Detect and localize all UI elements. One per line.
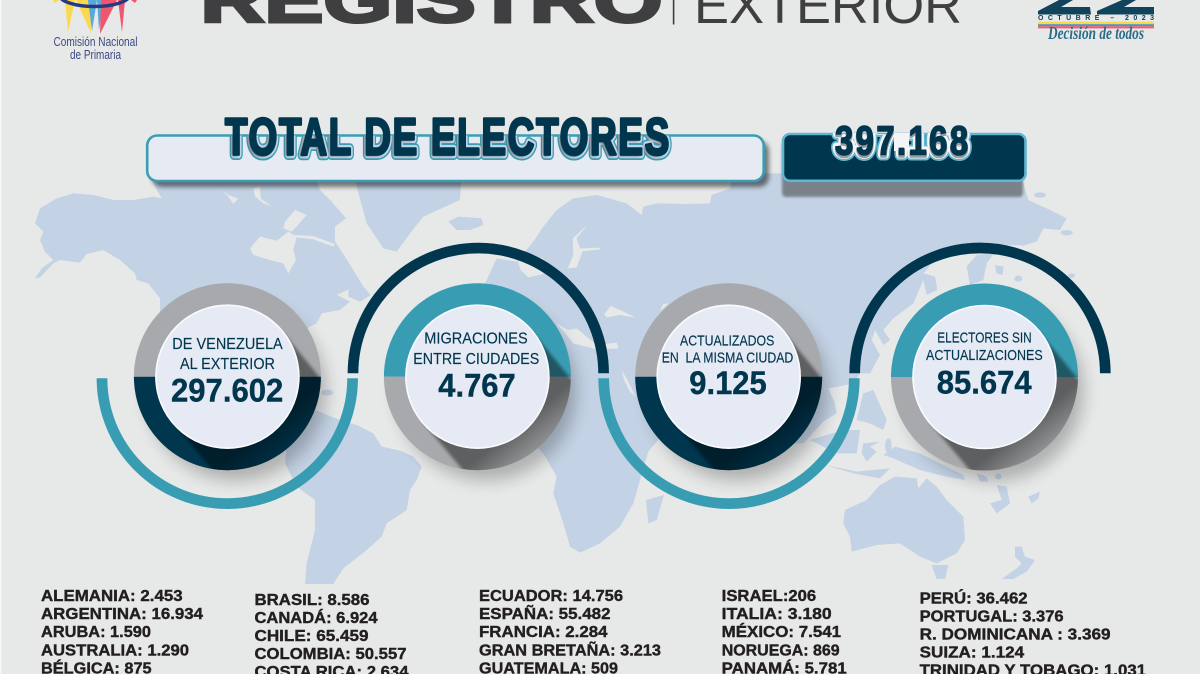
map: iceland: [448, 217, 483, 230]
title outline: [230, 136, 672, 160]
label line 2: ACTUALIZACIONES: [926, 348, 1043, 364]
number outline: [831, 133, 972, 161]
label: ELECTORES SIN: [937, 330, 1032, 346]
country list column 5: PORTUGAL: 3.376: [920, 608, 1064, 626]
ring and shadow: [635, 283, 836, 488]
title text: TOTAL DE ELECTORES: [225, 108, 671, 166]
label line 2: ENTRE CIUDADES: [413, 351, 539, 368]
map: australia: [843, 477, 965, 563]
country list column 2: BRASIL: 8.586: [254, 592, 370, 609]
country list column 1: ARUBA: 1.590: [41, 624, 151, 641]
header: registro exterior: [200, 0, 962, 36]
panel: electores sin actualizaciones: [891, 284, 1092, 489]
country list column 4: ITALIA: 3.180: [722, 606, 832, 623]
label: MIGRACIONES: [424, 330, 528, 347]
number outline: 397.168: [835, 118, 970, 164]
arc: navy over circle 4: [855, 248, 1105, 373]
panel: total de electores: [147, 108, 769, 187]
title box shadow: [152, 141, 769, 187]
value: 85.674: [937, 364, 1032, 400]
title box: [147, 136, 764, 181]
ring and shadow: [134, 283, 334, 488]
logo: 22 octubre 2023: [1038, 0, 1154, 43]
number box: [783, 134, 1026, 181]
country list column 1: ARGENTINA: 16.934: [41, 606, 203, 623]
number text: 397.168: [835, 118, 970, 164]
label: ACTUALIZADOS: [680, 334, 775, 350]
label line 2: AL EXTERIOR: [180, 356, 275, 373]
label: DE VENEZUELA: [172, 336, 283, 353]
country list column 5: PERÚ: 36.462: [920, 588, 1028, 608]
map: greenland: [357, 173, 462, 252]
country list column 2: COLOMBIA: 50.557: [254, 646, 407, 663]
country list column 2: CANADÁ: 6.924: [254, 608, 378, 627]
panel: total number: [782, 118, 1026, 197]
country list column 3: FRANCIA: 2.284: [479, 624, 608, 641]
arc: teal under circle 1: [102, 378, 353, 504]
heading separator: [673, 0, 674, 24]
country list column 4: MÉXICO: 7.541: [722, 622, 841, 641]
arc: navy over circle 2: [353, 248, 604, 373]
map: madagascar: [646, 495, 664, 523]
country list column 4: [722, 588, 847, 674]
map: asia-pacific islands: [810, 192, 1075, 513]
value: 297.602: [171, 373, 283, 409]
logo text: Comisión Nacional: [54, 34, 138, 49]
slogan: Decisión de todos: [1047, 23, 1144, 43]
large numerals 22: [1038, 0, 1154, 14]
country list column 1: [41, 588, 203, 674]
title outline: TOTAL DE ELECTORES: [223, 110, 669, 168]
panel: actualizados en la misma ciudad: [635, 283, 836, 488]
label line 2: EN LA MISMA CIUDAD: [662, 350, 793, 366]
country list column 3: ECUADOR: 14.756: [479, 588, 623, 605]
country list column 3: [479, 588, 661, 674]
panel: de venezuela al exterior: [134, 283, 334, 488]
arc: teal under circle 3: [604, 378, 854, 504]
ring and shadow: [891, 284, 1092, 489]
country list column 1: ALEMANIA: 2.453: [41, 588, 183, 605]
flag stripes: [1038, 22, 1154, 28]
value: 4.767: [438, 368, 516, 404]
title outline: TOTAL DE ELECTORES: [225, 108, 671, 166]
map: hudson bay and arctic channels: [222, 187, 335, 273]
map: tasmania: [932, 565, 948, 579]
ring and shadow: [384, 283, 584, 488]
country list column 4: ISRAEL:206: [722, 588, 816, 605]
number box shadow: [782, 142, 1023, 197]
country list column 2: CHILE: 65.459: [254, 628, 369, 645]
logo text line 2: de Primaria: [70, 47, 122, 62]
world map background: [35, 173, 1075, 584]
country list column 3: ESPAÑA: 55.482: [479, 603, 611, 623]
country list column 4: NORUEGA: 869: [722, 642, 840, 660]
country list column 3: GRAN BRETAÑA: 3.213: [479, 640, 661, 660]
map: new zealand: [1002, 547, 1035, 579]
logo icon: coloured figures and ring: [53, 0, 137, 34]
map: caribbean island: [321, 390, 333, 396]
country list column 1: AUSTRALIA: 1.290: [41, 642, 189, 660]
country list column 5: [920, 588, 1146, 674]
map: afro-eurasia: [460, 173, 1075, 579]
logo: comisión nacional de primaria: [53, 0, 138, 62]
map: north america: [35, 173, 483, 584]
value: 9.125: [689, 365, 767, 401]
country list column 5: R. DOMINICANA : 3.369: [920, 626, 1111, 644]
country list column 5: SUIZA: 1.124: [920, 644, 1024, 662]
date text: OCTUBRE – 2023: [1038, 15, 1154, 22]
panel: migraciones entre ciudades: [384, 283, 584, 488]
map: south america: [285, 410, 422, 584]
title outline: TOTAL DE ELECTORES: [225, 108, 671, 166]
number outline: 397.168: [835, 118, 970, 164]
country list column 2: [254, 592, 409, 674]
map: inland seas: [517, 225, 668, 397]
number outline: 397.168: [835, 120, 970, 166]
